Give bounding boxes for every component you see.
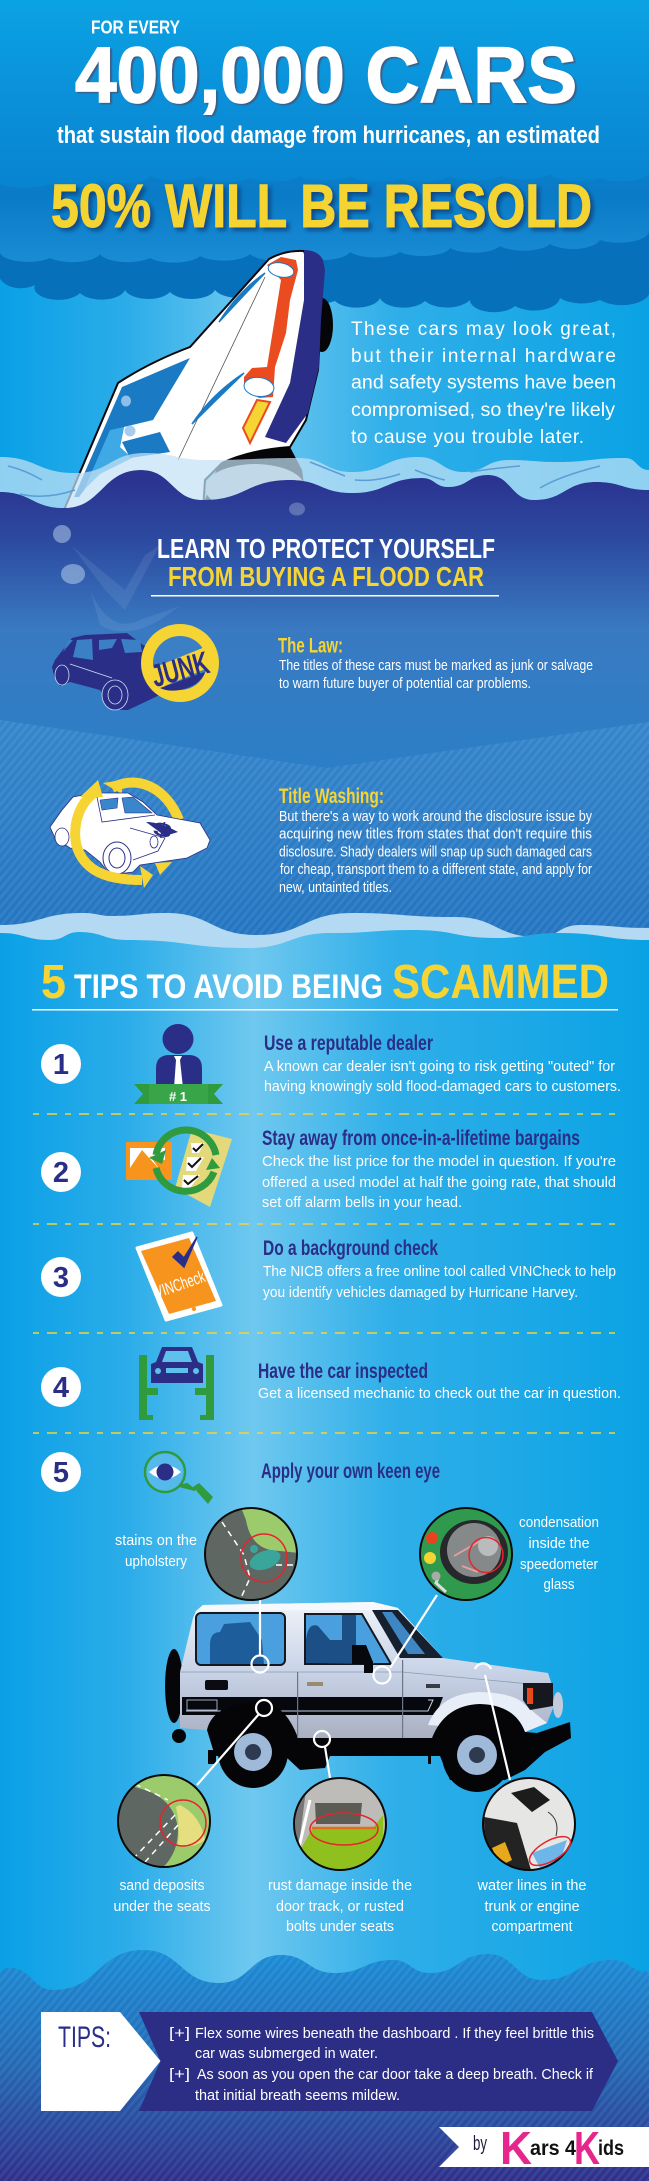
tips panel: that initial breath seems mildew. (195, 2087, 400, 2104)
text block: these cars may look great: compromised, so they're likely (351, 400, 616, 421)
text block: have the car inspected: Get a licensed mechanic to check out the car in question. (258, 1385, 621, 1402)
icon: top dealer: # 1 (169, 1089, 187, 1104)
callout: stains on the upholstery (115, 1505, 300, 1600)
text block: the law: The Law: (278, 634, 343, 658)
tips panel: car was submerged in water. (195, 2045, 378, 2062)
text block: stay away from bargains: offered a used model at half the going rate, that should (262, 1174, 616, 1191)
callout: rust damage in door track: rust damage inside the (268, 1877, 412, 1894)
text block: the law (278, 634, 593, 692)
heading: 5 tips to avoid being scammed (32, 956, 618, 1010)
text block: these cars may look great: but their internal hardware (351, 346, 616, 367)
callout: condensation in speedometer: condensation (519, 1514, 599, 1531)
text block: these cars may look great: to cause you trouble later. (351, 427, 584, 448)
tips panel: [+] (169, 2066, 190, 2083)
text block: use a reputable dealer: Use a reputable dealer (264, 1032, 433, 1055)
callout pointers (197, 1595, 510, 1785)
storm cloud band (0, 0, 649, 312)
wave: foam transition (0, 913, 649, 975)
callout: water lines in trunk: water lines in the (477, 1877, 586, 1894)
deep water: protect section (0, 470, 649, 950)
callout: condensation in speedometer: inside the (528, 1535, 590, 1552)
photo: white suv (165, 1602, 571, 1792)
icon: vincheck tablet: VINCheck (152, 1267, 208, 1302)
heading: 5 tips to avoid being scammed: TIPS TO AVOID BEING (74, 968, 383, 1006)
text block: title washing: Title Washing: (279, 785, 384, 808)
callout: rust damage in door track: door track, or rusted (276, 1898, 404, 1915)
illustration: sinking car (64, 250, 333, 512)
heading: 5 tips to avoid being scammed: SCAMMED (392, 956, 609, 1009)
heading: 400,000 cars: 400,000 CARS (75, 30, 577, 119)
badge: number 3 (41, 1257, 81, 1297)
badge: number 4 (41, 1367, 81, 1407)
text block: these cars may look great: These cars may look great, (351, 319, 616, 340)
logo ribbon: by kars 4 kids: ids (598, 2137, 624, 2160)
badge: number 5: 5 (53, 1457, 69, 1489)
badge: number 2: 2 (53, 1157, 69, 1189)
badge: number 1 (41, 1044, 81, 1084)
icon: junk car (52, 624, 219, 710)
logo ribbon: by kars 4 kids: ars 4 (530, 2137, 576, 2160)
logo ribbon: by kars 4 kids: K (574, 2122, 600, 2174)
heading: learn to protect yourself: LEARN TO PROTECT YOURSELF (157, 533, 495, 564)
icon: magnifying eye (145, 1452, 213, 1504)
footer: wavy dark water (0, 1950, 649, 2181)
heading: 5 tips to avoid being scammed: 5 (41, 956, 66, 1009)
text block: title washing (279, 785, 592, 896)
badge: number 4: 4 (53, 1372, 69, 1404)
text block: title washing: new, untainted titles. (279, 879, 392, 896)
badge: number 5 (41, 1452, 81, 1492)
callout: condensation in speedometer: speedometer (520, 1556, 598, 1573)
heading: apply your own keen eye: Apply your own keen eye (261, 1460, 440, 1483)
callout: sand deposits: under the seats (114, 1898, 210, 1915)
text block: use a reputable dealer (264, 1032, 621, 1095)
text block: stay away from bargains (262, 1127, 616, 1211)
text block: the law: to warn future buyer of potential car problems. (279, 675, 531, 692)
water surface wave (0, 453, 649, 508)
icon: top dealer (134, 1024, 223, 1104)
badge: number 2 (41, 1152, 81, 1192)
tips panel (139, 2012, 618, 2111)
heading: learn to protect yourself (151, 533, 499, 596)
callout: condensation in speedometer: glass (544, 1576, 574, 1593)
text block: these cars may look great: and safety systems have been (351, 372, 616, 394)
text block: have the car inspected (258, 1360, 621, 1402)
icon: junk car: JUNK (148, 644, 213, 694)
icon: title washing car: $ (151, 817, 174, 843)
ghost of sunken car (53, 502, 305, 631)
callout: stains on the upholstery: upholstery (125, 1553, 187, 1570)
heading: learn to protect yourself: FROM BUYING A FLOOD CAR (168, 561, 484, 592)
tips label: TIPS: (58, 2021, 111, 2054)
heading: for every: FOR EVERY (91, 18, 180, 38)
text block: do a background check: you identify vehicles damaged by Hurricane Harvey. (263, 1284, 578, 1301)
callout: rust damage in door track (268, 1778, 412, 1935)
text block: do a background check: The NICB offers a free online tool called VINCheck to help (263, 1263, 616, 1280)
logo ribbon: by kars 4 kids: by (473, 2133, 487, 2155)
striped chevron panel (0, 720, 649, 950)
icon: vincheck tablet (137, 1233, 221, 1320)
tips panel: As soon as you open the car door take a deep breath. Check if (197, 2066, 594, 2083)
callout: water lines in trunk: compartment (492, 1918, 573, 1935)
tips panel: [+] (169, 2025, 190, 2042)
callout: condensation in speedometer (420, 1508, 599, 1600)
logo ribbon: by kars 4 kids (439, 2122, 649, 2174)
text block: these cars may look great (351, 319, 616, 448)
callout: stains on the upholstery: stains on the (115, 1532, 197, 1549)
logo ribbon: by kars 4 kids: K (500, 2122, 532, 2174)
callout: water lines in trunk (477, 1778, 586, 1935)
text block: stay away from bargains: set off alarm bells in your head. (262, 1194, 462, 1211)
callout: water lines in trunk: trunk or engine (484, 1898, 580, 1915)
callout: rust damage in door track: bolts under seats (286, 1918, 394, 1935)
text block: title washing: acquiring new titles from states that don't require this (279, 826, 592, 842)
callout: sand deposits (114, 1775, 210, 1915)
text block: use a reputable dealer: having knowingly sold flood-damaged cars to customers. (264, 1078, 621, 1095)
icon: title washing car (50, 780, 210, 888)
text block: do a background check (263, 1237, 616, 1301)
tips panel: Flex some wires beneath the dashboard . If they feel brittle this (195, 2025, 594, 2042)
tips label (41, 2012, 160, 2111)
badge: number 1: 1 (53, 1049, 69, 1081)
text block: have the car inspected: Have the car inspected (258, 1360, 428, 1383)
callout: sand deposits: sand deposits (120, 1877, 204, 1894)
icon: car on lift (139, 1347, 214, 1420)
text block: use a reputable dealer: A known car dealer isn't going to risk getting "outed" for (264, 1058, 615, 1075)
text block: title washing: But there's a way to work around the disclosure issue by (279, 808, 592, 825)
text block: do a background check: Do a background check (263, 1237, 438, 1260)
badge: number 3: 3 (53, 1262, 69, 1294)
icon: bargain checklist (126, 1129, 232, 1207)
text block: stay away from bargains: Check the list price for the model in question. If you're (262, 1153, 616, 1170)
